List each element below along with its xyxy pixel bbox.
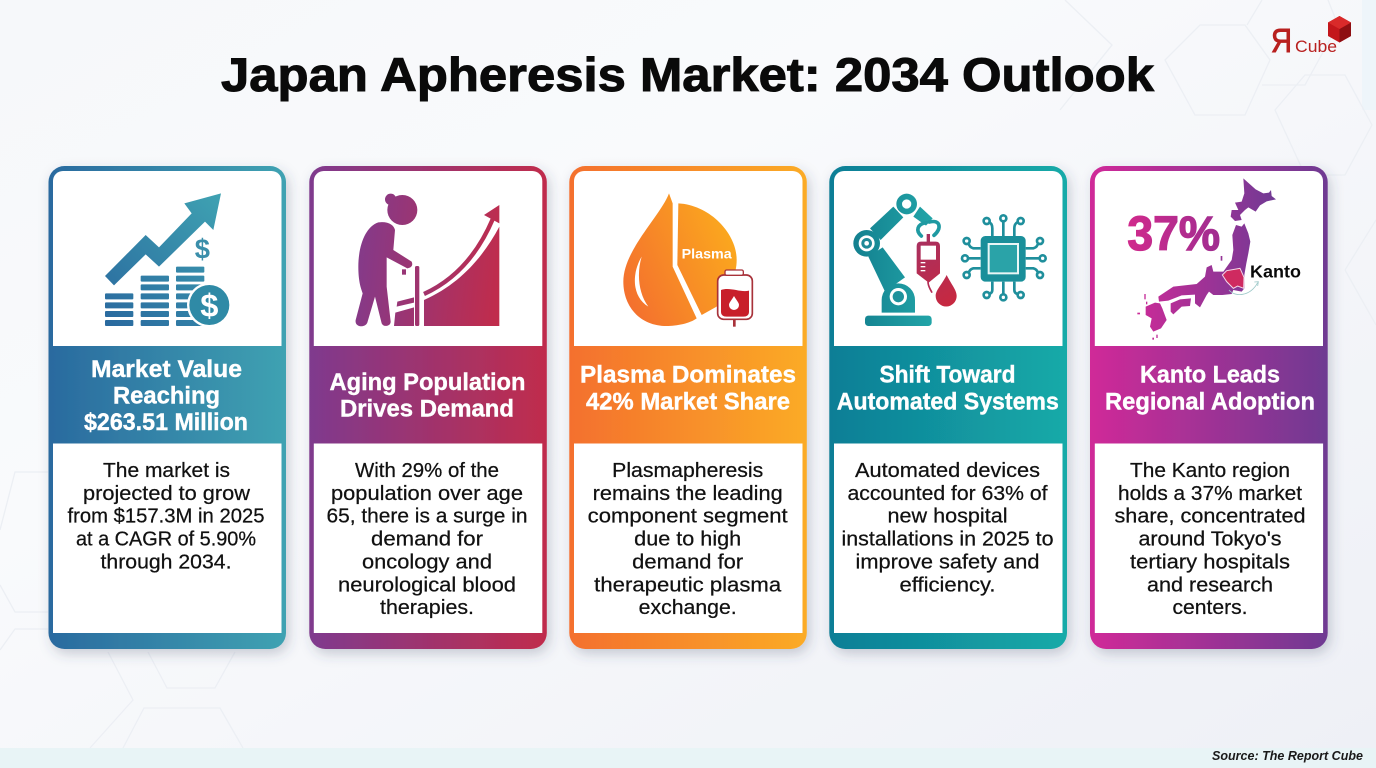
heading: $263.51 Million — [84, 409, 248, 436]
text block: population over age — [331, 482, 523, 505]
heading — [330, 369, 526, 423]
heading: Aging Population — [330, 369, 526, 396]
heading: Automated Systems — [837, 388, 1059, 415]
panel: Kanto region — [1090, 166, 1328, 649]
text block: around Tokyo's — [1138, 528, 1282, 550]
text block: neurological blood — [338, 573, 516, 596]
text block — [68, 459, 264, 574]
text block: installations in 2025 to — [842, 528, 1054, 550]
heading — [1105, 362, 1315, 415]
text block: new hospital — [888, 505, 1008, 528]
icon: robot arm, blood bag and chip — [853, 194, 1046, 326]
heading — [580, 362, 796, 415]
text block: efficiency. — [900, 573, 996, 596]
text block: Automated devices — [855, 459, 1040, 482]
heading: Drives Demand — [340, 396, 514, 423]
heading: Plasma Dominates — [580, 362, 796, 389]
panel: automated systems — [829, 166, 1067, 649]
panel: market value — [48, 166, 286, 649]
icon: plasma drop and blood bag — [623, 193, 752, 327]
icon: Japan map with Kanto highlighted — [1127, 178, 1301, 340]
text block: from $157.3M in 2025 — [68, 505, 264, 528]
text block: With 29% of the — [355, 459, 499, 482]
heading — [84, 356, 248, 436]
source note: Source: The Report Cube — [1212, 749, 1363, 763]
text block: demand for — [371, 528, 483, 550]
text block: remains the leading — [593, 482, 783, 505]
text block: component segment — [588, 505, 788, 528]
text block: exchange. — [639, 596, 737, 619]
icon: elderly person with rising curve — [356, 194, 499, 326]
logo: RCube — [1271, 16, 1351, 59]
text block — [326, 459, 528, 619]
heading: 42% Market Share — [586, 388, 790, 415]
title: Japan Apheresis Market: 2034 Outlook — [221, 48, 1155, 101]
text block: demand for — [632, 550, 743, 574]
icon: Japan map with Kanto highlighted: 37% — [1127, 207, 1220, 261]
text block: improve safety and — [856, 550, 1040, 574]
icon: plasma drop and blood bag: Plasma — [682, 245, 732, 261]
heading: Market Value — [91, 356, 242, 383]
heading: Reaching — [113, 382, 220, 410]
text block — [1114, 459, 1306, 619]
text block: 65, there is a surge in — [326, 505, 528, 528]
icon: Japan map with Kanto highlighted: Kanto — [1250, 261, 1301, 281]
heading: Regional Adoption — [1105, 388, 1315, 415]
heading — [837, 362, 1059, 415]
text block: tertiary hospitals — [1130, 550, 1290, 574]
text block: accounted for 63% of — [848, 482, 1048, 505]
text block: oncology and — [362, 550, 492, 574]
text block: centers. — [1172, 596, 1248, 619]
heading: Kanto Leads — [1140, 362, 1280, 389]
text block: therapies. — [380, 596, 474, 619]
text block: holds a 37% market — [1118, 482, 1302, 505]
text block: The Kanto region — [1130, 459, 1290, 482]
text block: therapeutic plasma — [594, 573, 782, 596]
panel: aging population — [309, 166, 547, 649]
icon: growth arrow and coins — [105, 193, 232, 327]
text block: and research — [1147, 573, 1273, 596]
text block: Plasmapheresis — [612, 459, 763, 482]
logo: RCube: Я — [1271, 22, 1292, 59]
heading: Shift Toward — [880, 362, 1016, 389]
text block — [842, 459, 1054, 596]
text block: The market is — [103, 459, 230, 482]
text block: share, concentrated — [1114, 505, 1306, 528]
text block — [588, 459, 788, 619]
text block: projected to grow — [83, 482, 250, 505]
icon: growth arrow and coins: $ — [195, 233, 210, 264]
icon: growth arrow and coins: $ — [200, 287, 218, 324]
text block: through 2034. — [100, 550, 232, 574]
text block: at a CAGR of 5.90% — [76, 528, 256, 550]
logo: RCube: Cube — [1295, 37, 1337, 56]
panel: plasma share — [569, 166, 807, 649]
text block: due to high — [634, 528, 741, 550]
